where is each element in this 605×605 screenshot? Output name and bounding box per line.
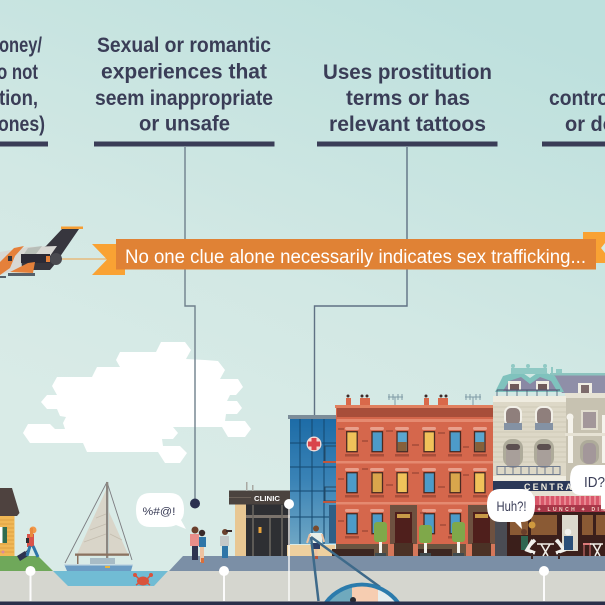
magnifying glass [311, 537, 400, 603]
speech bubble: swearing: %#@! [142, 506, 176, 518]
balcony [497, 466, 560, 474]
banner [92, 232, 605, 275]
speech bubble: swearing [136, 493, 186, 529]
heading: sexual or romantic experiences: Sexual or romantic [97, 34, 271, 57]
crab [133, 573, 153, 586]
cafe patrons and tables [521, 529, 603, 559]
connector: prostitution terms to runner [310, 147, 407, 509]
speech bubble: Huh?! [487, 489, 535, 529]
heading: sexual or romantic experiences [94, 34, 274, 146]
chimneys and antennas [346, 394, 481, 405]
upper arched windows [504, 406, 553, 430]
banner text: No one clue alone necessarily indicates sex trafficking... [125, 247, 586, 268]
street trees [374, 522, 465, 556]
speech bubble: ID? [570, 465, 605, 509]
windows row 2 [347, 473, 485, 493]
brick building [332, 394, 496, 556]
banner ribbon [116, 239, 596, 270]
heading: money clue (cropped): tion, [0, 87, 38, 110]
street [169, 556, 605, 571]
lower arched windows [503, 439, 554, 468]
sailboat [64, 482, 133, 571]
heading: money clue (cropped) [0, 34, 48, 146]
cloud [23, 342, 251, 463]
heading: money clue (cropped): oney/ [0, 34, 42, 57]
grand stone building [493, 364, 605, 481]
heading: uses prostitution terms: terms or has [346, 87, 470, 110]
cafe storefront [493, 481, 605, 556]
cafe storefront: ✦ LUNCH ✦ DIN [537, 507, 605, 513]
doorways [390, 505, 495, 544]
house [0, 488, 20, 556]
heading: controlled clue (cropped) [542, 87, 605, 146]
passer-by [220, 529, 232, 558]
icon: red cross [306, 436, 322, 452]
banner right tail [583, 232, 605, 263]
base and steps [332, 543, 496, 556]
windows row 1 [347, 432, 485, 452]
heading: sexual or romantic experiences: experiences that [101, 60, 267, 84]
clinic building [229, 482, 290, 556]
speech bubble: Huh?!: Huh?! [496, 498, 526, 514]
connector: sexual or romantic to couple [185, 147, 200, 508]
window lintels [345, 427, 487, 512]
heading: sexual or romantic experiences: or unsafe [139, 112, 230, 136]
ground band [0, 571, 605, 605]
white pins on timeline [26, 499, 549, 601]
heading: uses prostitution terms: Uses prostitution [323, 61, 492, 84]
windows row 3 [347, 514, 460, 534]
heading: uses prostitution terms [317, 61, 498, 146]
water [53, 571, 168, 586]
runner figure [307, 526, 324, 559]
clinic building: CLINIC [254, 496, 280, 503]
heading: uses prostitution terms: relevant tattoos [329, 113, 486, 136]
heading: sexual or romantic experiences: seem inappropriate [95, 87, 273, 110]
traveller with suitcase [17, 526, 38, 561]
cafe storefront: CENTRA [524, 482, 572, 492]
blue hospital building [287, 415, 337, 556]
icon: airplane towing banner [0, 226, 107, 278]
grass hill [0, 556, 53, 571]
couple [190, 526, 206, 563]
right wing details [565, 410, 605, 464]
banner left tail [92, 244, 125, 275]
